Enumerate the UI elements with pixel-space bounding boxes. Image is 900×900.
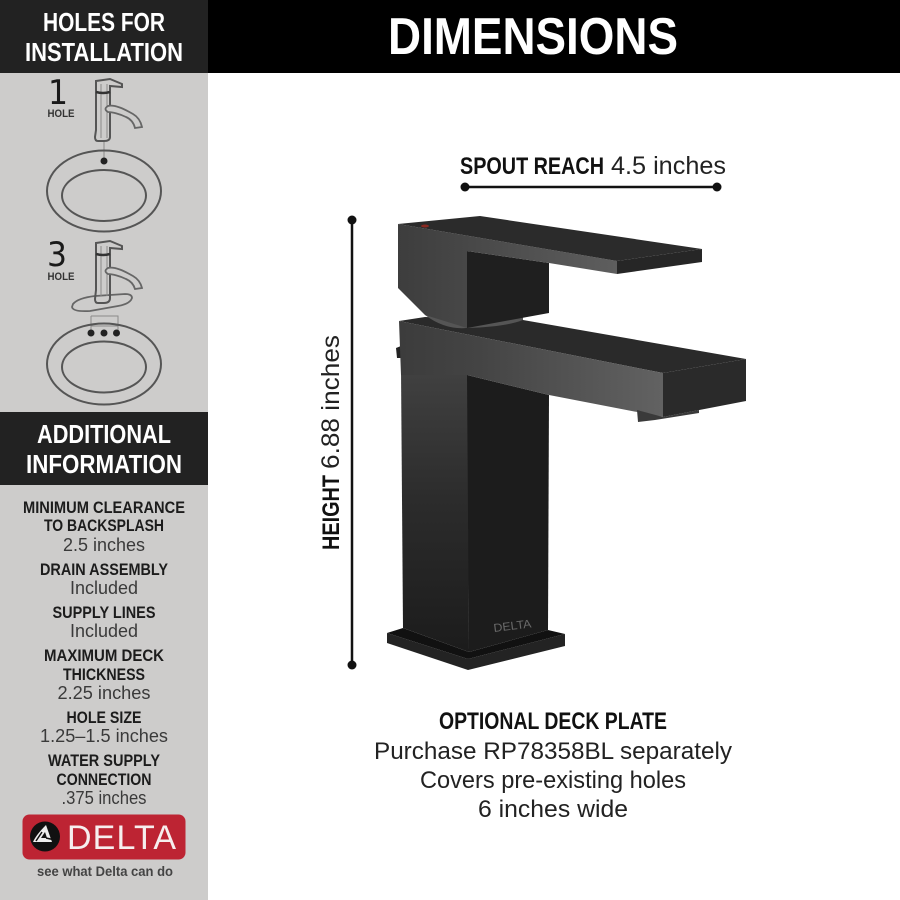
text block: optional deck plate: OPTIONAL DECK PLATE	[439, 708, 667, 735]
dimension: spout reach	[460, 152, 726, 192]
heading: holes for installation: HOLES FOR	[43, 7, 165, 37]
icon: one hole faucet and sink: HOLE	[48, 108, 74, 120]
text block: hole size: HOLE SIZE	[66, 708, 142, 727]
text block: hole size: 1.25–1.5 inches	[40, 726, 168, 746]
text block: drain assembly: DRAIN ASSEMBLY	[40, 560, 169, 579]
text block: supply lines: SUPPLY LINES	[52, 603, 156, 622]
text block: optional deck plate: Purchase RP78358BL separately	[374, 738, 732, 765]
dimension: height: 6.88 inches	[317, 335, 345, 469]
text block: drain assembly: Included	[70, 578, 138, 598]
text block: optional deck plate	[374, 708, 732, 823]
tagline: see what Delta can do	[37, 864, 173, 879]
text block: minimum clearance	[23, 498, 185, 555]
icon: one hole faucet and sink: 1	[48, 73, 68, 113]
icon: three hole faucet with plate and sink: HOLE	[48, 271, 74, 283]
heading: dimensions banner	[208, 0, 900, 73]
dimension: spout reach: 4.5 inches	[611, 152, 726, 180]
heading: additional information: INFORMATION	[26, 449, 182, 479]
text block: minimum clearance: TO BACKSPLASH	[44, 516, 164, 535]
text block: hole size	[40, 708, 168, 746]
text block: maximum deck thickness: THICKNESS	[63, 665, 145, 684]
heading: holes for installation: INSTALLATION	[25, 37, 183, 67]
text block: supply lines: Included	[70, 621, 138, 641]
dimension: height: HEIGHT	[318, 475, 345, 550]
text block: optional deck plate: Covers pre-existing holes	[420, 767, 686, 794]
text block: water supply connection: .375 inches	[62, 788, 146, 808]
text block: optional deck plate: 6 inches wide	[478, 796, 628, 823]
faucet body	[396, 346, 549, 652]
faucet handle	[398, 216, 702, 328]
faucet spout	[399, 317, 746, 422]
text block: supply lines	[52, 603, 156, 641]
dimension: height	[317, 216, 356, 670]
text block: maximum deck thickness	[44, 646, 165, 703]
logo: delta: DELTA	[67, 819, 176, 857]
text block: water supply connection	[48, 751, 161, 808]
panel: sidebar	[0, 0, 208, 900]
text block: maximum deck thickness: MAXIMUM DECK	[44, 646, 165, 665]
heading: holes for installation	[0, 0, 208, 73]
dimension: spout reach: SPOUT REACH	[460, 153, 604, 180]
text block: drain assembly	[40, 560, 169, 598]
text block: minimum clearance: 2.5 inches	[63, 535, 145, 555]
illustration: faucet	[387, 216, 746, 670]
icon: one hole faucet and sink	[47, 73, 161, 232]
heading: additional information: ADDITIONAL	[37, 419, 171, 449]
heading: additional information	[0, 412, 208, 485]
faucet base plate	[387, 628, 565, 670]
icon: three hole faucet with plate and sink	[47, 235, 161, 404]
icon: three hole faucet with plate and sink: 3	[47, 235, 67, 275]
logo: delta	[22, 814, 186, 860]
text block: minimum clearance: MINIMUM CLEARANCE	[23, 498, 185, 517]
text block: water supply connection: WATER SUPPLY	[48, 751, 161, 770]
faucet logo: DELTA	[493, 618, 532, 635]
heading: dimensions banner: DIMENSIONS	[388, 8, 678, 66]
text block: maximum deck thickness: 2.25 inches	[58, 683, 150, 703]
text block: water supply connection: CONNECTION	[56, 770, 152, 789]
